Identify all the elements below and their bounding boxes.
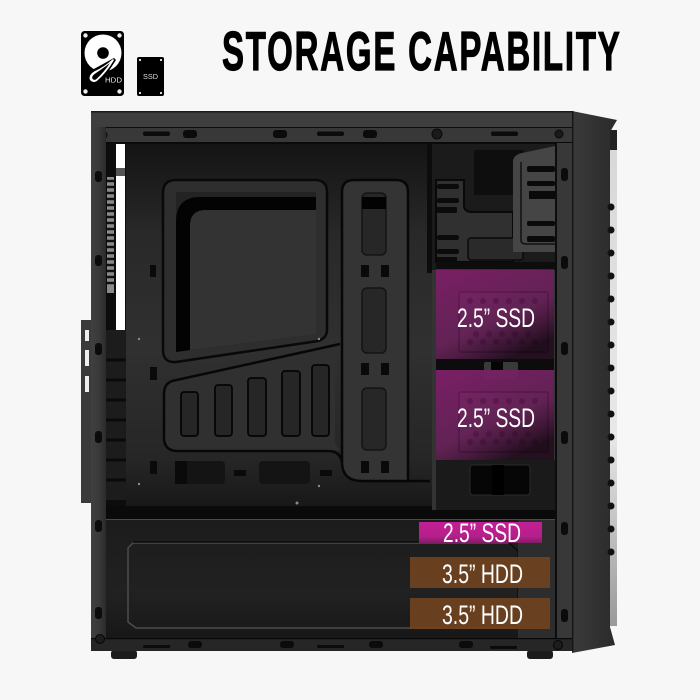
storage slot: 2.5 inch SSD 2: 2.5” SSD: [457, 403, 535, 433]
rear expansion slots: [106, 143, 126, 518]
lower cable cutout bay: [164, 344, 430, 481]
right drive bay area: [427, 143, 557, 510]
drive cages: [436, 292, 554, 452]
storage slot: 2.5 inch SSD 1: 2.5” SSD: [457, 303, 535, 333]
icon: SSD: SSD: [143, 74, 158, 81]
rear I/O bracket: [81, 320, 93, 503]
large CPU cutout: [163, 180, 327, 362]
tray holes and bottom ledge: [106, 265, 561, 520]
icon: HDD: [81, 31, 124, 96]
storage slot: 2.5 inch SSD 2: [436, 370, 554, 460]
bottom rail: [91, 634, 572, 651]
PSU shroud: [106, 519, 558, 641]
storage slot: 3.5 inch HDD 1: 3.5” HDD: [442, 559, 523, 589]
icon: SSD: [137, 57, 164, 96]
vertical centre column: [342, 180, 408, 481]
drive bracket: [513, 146, 555, 252]
storage slot: 2.5 inch SSD 1: [436, 269, 554, 359]
chassis interior: [91, 127, 573, 651]
top panel: [91, 111, 573, 144]
PC case: [81, 111, 617, 659]
right pillar: [555, 111, 574, 652]
front panel: [572, 111, 617, 653]
title: STORAGE CAPABILITY: [222, 20, 620, 82]
icon: HDD: HDD: [105, 76, 123, 84]
left rail: [91, 127, 106, 651]
storage slot: 3.5 inch HDD 2: 3.5” HDD: [442, 600, 523, 630]
storage slot: 2.5 inch SSD 3: 2.5” SSD: [443, 518, 521, 548]
motherboard tray: [125, 143, 557, 515]
case feet: [111, 650, 553, 659]
